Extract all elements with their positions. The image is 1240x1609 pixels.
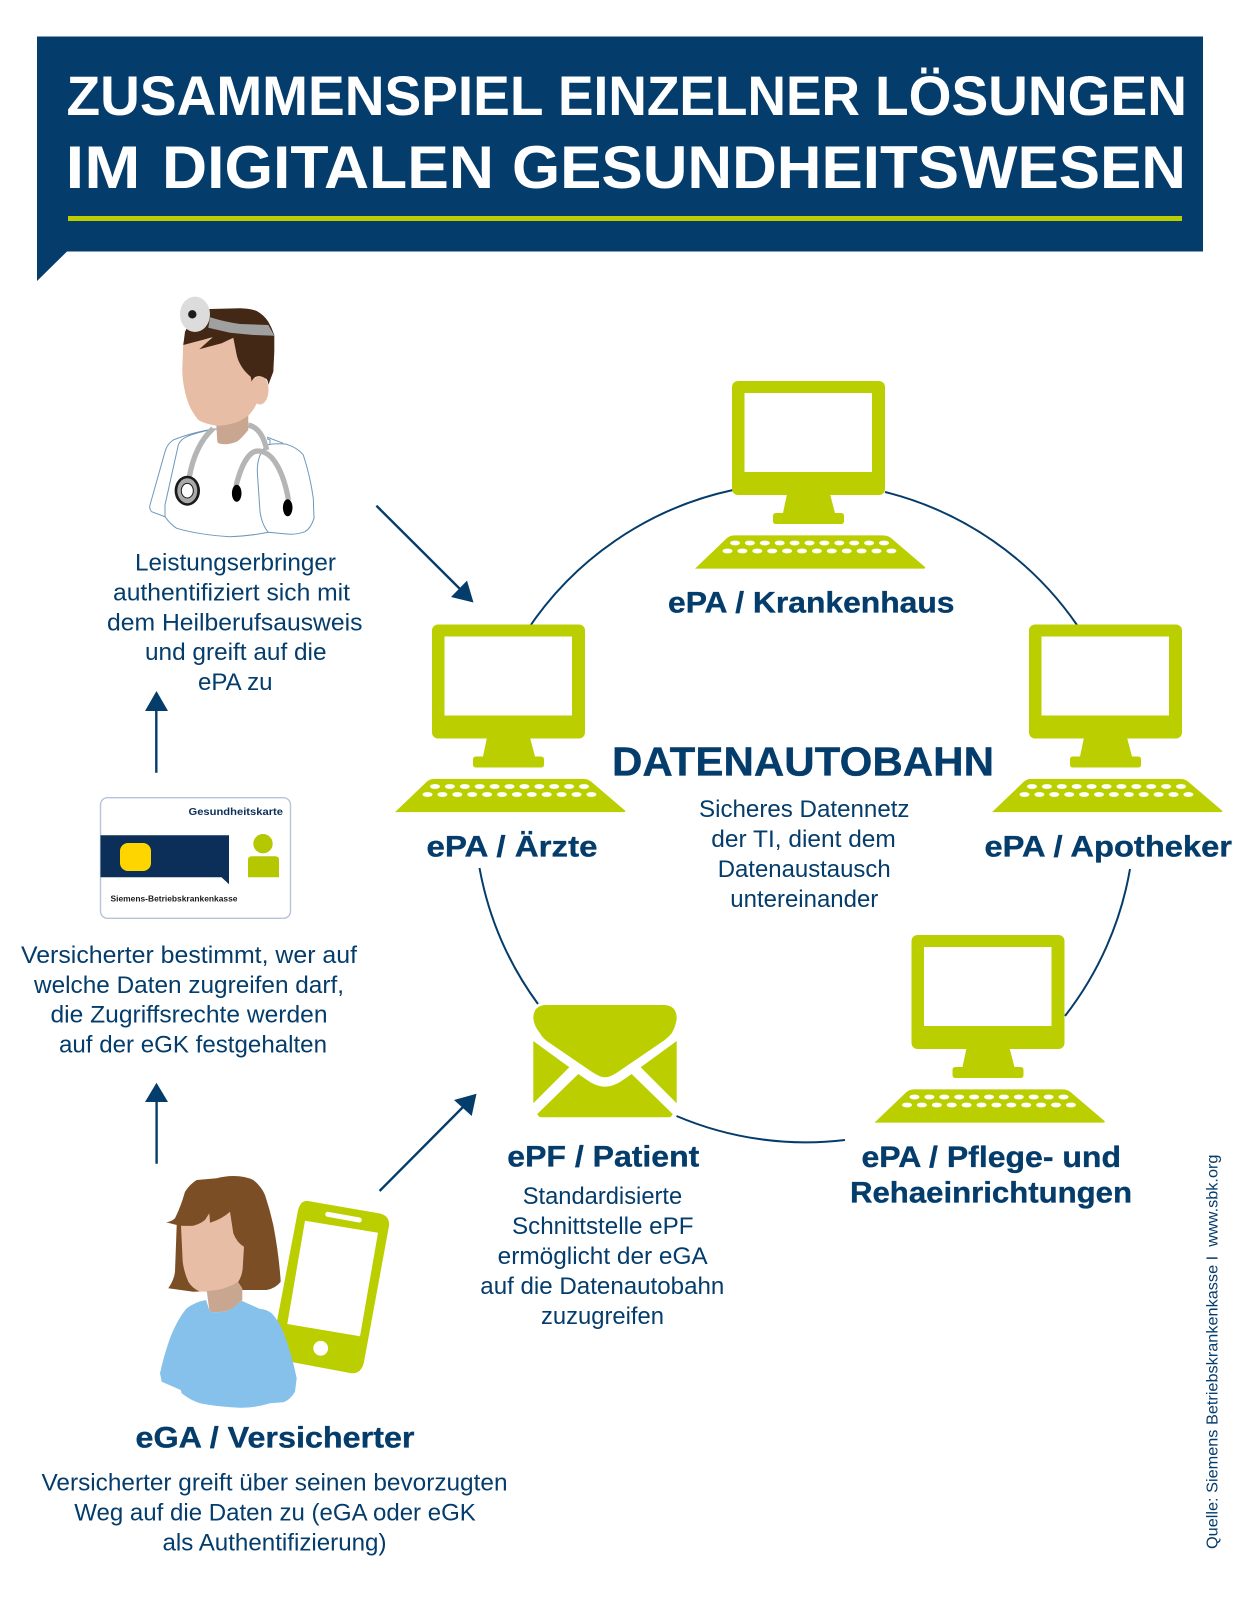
icon: health card bbox=[100, 798, 290, 918]
text: ePF description: auf die Datenautobahn bbox=[480, 1273, 724, 1300]
text: Versicherter bestimmt: welche Daten zugreifen darf, bbox=[33, 972, 344, 999]
text: Versicherter bestimmt: die Zugriffsrechte werden bbox=[50, 1002, 328, 1029]
icon: smartphone bbox=[270, 1201, 389, 1373]
text: Versicherter greift: Versicherter greift über seinen bevorzugten bbox=[42, 1470, 508, 1497]
woman face bbox=[181, 1212, 244, 1292]
icon: computer Pflege bbox=[874, 935, 1105, 1123]
title line 1: LÖSUNGEN bbox=[875, 65, 1187, 127]
text: Versicherter greift: als Authentifizierung) bbox=[162, 1530, 386, 1557]
text: Leistungserbringer bbox=[107, 550, 362, 696]
text: Versicherter bestimmt: auf der eGK festgehalten bbox=[59, 1032, 327, 1058]
arrow: doctor to ePA bbox=[376, 506, 474, 602]
woman neck bbox=[206, 1282, 242, 1312]
text: Datenautobahn description bbox=[699, 796, 910, 913]
arrow: insured to card bbox=[145, 1083, 168, 1164]
woman hair bbox=[166, 1176, 281, 1292]
doctor neck bbox=[216, 412, 248, 444]
text: Leistungserbringer: Leistungserbringer bbox=[135, 550, 336, 576]
doctor face bbox=[182, 335, 258, 426]
head band bbox=[208, 317, 274, 336]
icon: computer Krankenhaus bbox=[695, 381, 925, 569]
text: Datenautobahn description: der TI, dient dem bbox=[711, 826, 896, 853]
text: Leistungserbringer: authentifiziert sich mit bbox=[113, 580, 350, 606]
source note: Quelle: Siemens Betriebskrankenkasse I www.sbk.org bbox=[1204, 1154, 1222, 1549]
text: Leistungserbringer: und greift auf die bbox=[145, 639, 326, 666]
icon: envelope bbox=[533, 1005, 677, 1117]
icon: computer Ärzte bbox=[395, 624, 625, 812]
doctor coat bbox=[150, 429, 314, 537]
heading: ePA / Ärzte: ePA / Ärzte bbox=[426, 830, 598, 864]
icon: health card: Siemens-Betriebskrankenkasse bbox=[110, 893, 238, 903]
icon: health card: Gesundheitskarte bbox=[188, 807, 283, 818]
icon: insured woman bbox=[160, 1176, 297, 1408]
text: Datenautobahn description: Sicheres Datennetz bbox=[699, 796, 910, 823]
title line 2: IM bbox=[66, 133, 140, 201]
heading: eGA / Versicherter: eGA / Versicherter bbox=[136, 1421, 415, 1454]
heading: ePA / Pflege- und Rehaeinrichtungen: ePA / Pflege- und bbox=[862, 1141, 1121, 1174]
text: Versicherter greift: Weg auf die Daten zu (eGA oder eGK bbox=[74, 1500, 476, 1527]
heading: ePA / Krankenhaus: ePA / Krankenhaus bbox=[668, 586, 954, 620]
doctor hair bbox=[183, 308, 274, 385]
text: Versicherter greift bbox=[42, 1470, 508, 1557]
doctor ear bbox=[252, 376, 268, 404]
title line 2 bbox=[66, 133, 1186, 201]
network ring connecting the systems bbox=[480, 490, 1130, 1142]
stethoscope bbox=[189, 425, 288, 500]
text: Datenautobahn description: Datenaustausch bbox=[718, 856, 891, 883]
arrow: insured to ePF bbox=[380, 1094, 476, 1191]
heading: Datenautobahn: DATENAUTOBAHN bbox=[612, 739, 994, 785]
heading: ePA / Pflege- und Rehaeinrichtungen: Rehaeinrichtungen bbox=[850, 1176, 1132, 1210]
title line 2: GESUNDHEITSWESEN bbox=[512, 133, 1186, 201]
text: ePF description: Standardisierte bbox=[523, 1183, 682, 1210]
heading: ePF / Patient: ePF / Patient bbox=[507, 1140, 699, 1174]
title line 1: ZUSAMMENSPIEL bbox=[66, 65, 544, 127]
icon: doctor bbox=[150, 297, 314, 537]
text: ePF description: zuzugreifen bbox=[541, 1303, 664, 1330]
title line 2: DIGITALEN bbox=[162, 133, 494, 201]
heading: ePA / Pflege- und Rehaeinrichtungen bbox=[850, 1141, 1132, 1210]
title line 1 bbox=[66, 65, 1187, 127]
text: Leistungserbringer: ePA zu bbox=[198, 669, 272, 696]
text: ePF description bbox=[480, 1183, 724, 1330]
arrow: card to doctor bbox=[145, 691, 168, 773]
text: Versicherter bestimmt bbox=[21, 942, 357, 1058]
title line 1: EINZELNER bbox=[558, 65, 860, 127]
head mirror bbox=[180, 297, 210, 332]
title banner bbox=[37, 36, 1203, 281]
text: ePF description: Schnittstelle ePF bbox=[512, 1213, 694, 1240]
icon: computer Apotheker bbox=[992, 624, 1222, 812]
text: ePF description: ermöglicht der eGA bbox=[498, 1243, 708, 1270]
woman sweater bbox=[160, 1300, 297, 1408]
text: Leistungserbringer: dem Heilberufsausweis bbox=[107, 609, 362, 636]
text: Datenautobahn description: untereinander bbox=[730, 886, 878, 913]
text: Versicherter bestimmt: Versicherter bestimmt, wer auf bbox=[21, 942, 357, 969]
heading: ePA / Apotheker: ePA / Apotheker bbox=[984, 830, 1232, 864]
